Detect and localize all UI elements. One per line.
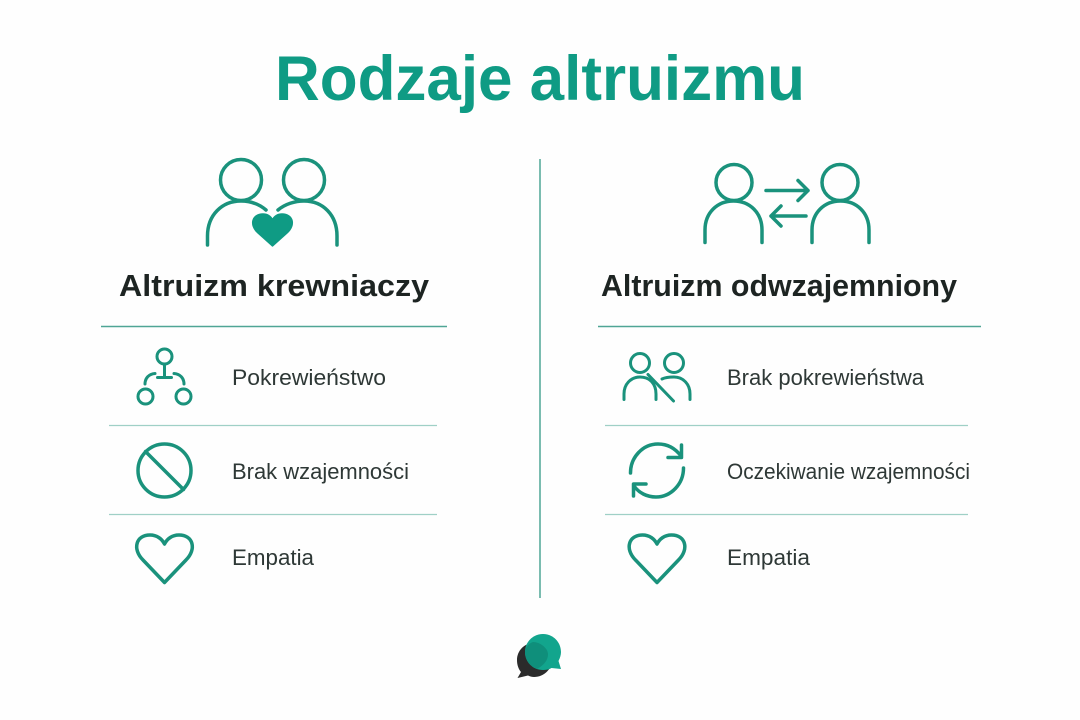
heading: reciprocal altruism: Altruizm odwzajemniony — [601, 268, 958, 303]
label: Brak pokrewieństwa — [727, 365, 925, 390]
icon: two people with heart — [208, 160, 337, 246]
row: Pokrewieństwo — [138, 349, 386, 404]
row: Brak wzajemności — [138, 444, 409, 497]
icon: cycle arrows — [630, 444, 684, 497]
title: Rodzaje altruizmu — [275, 44, 805, 114]
row: Empatia — [629, 535, 811, 582]
label: Brak wzajemności — [232, 459, 409, 484]
logo: speech bubbles — [517, 634, 561, 678]
label: Empatia — [727, 545, 811, 570]
icon: heart outline — [137, 535, 192, 582]
row: Oczekiwanie wzajemności — [630, 444, 970, 497]
label: Empatia — [232, 545, 315, 570]
icon: two people crossed — [624, 354, 690, 401]
panel: reciprocal altruism — [598, 164, 981, 582]
icon: heart outline — [629, 535, 685, 582]
panel: kin altruism — [101, 160, 447, 582]
row: Brak pokrewieństwa — [624, 354, 925, 401]
label: Pokrewieństwo — [232, 365, 386, 390]
icon: family tree — [138, 349, 191, 404]
label: Oczekiwanie wzajemności — [727, 459, 970, 484]
heading: kin altruism: Altruizm krewniaczy — [119, 268, 430, 303]
icon: prohibition sign — [138, 444, 191, 497]
icon: two people exchanging — [705, 164, 869, 242]
row: Empatia — [137, 535, 315, 582]
